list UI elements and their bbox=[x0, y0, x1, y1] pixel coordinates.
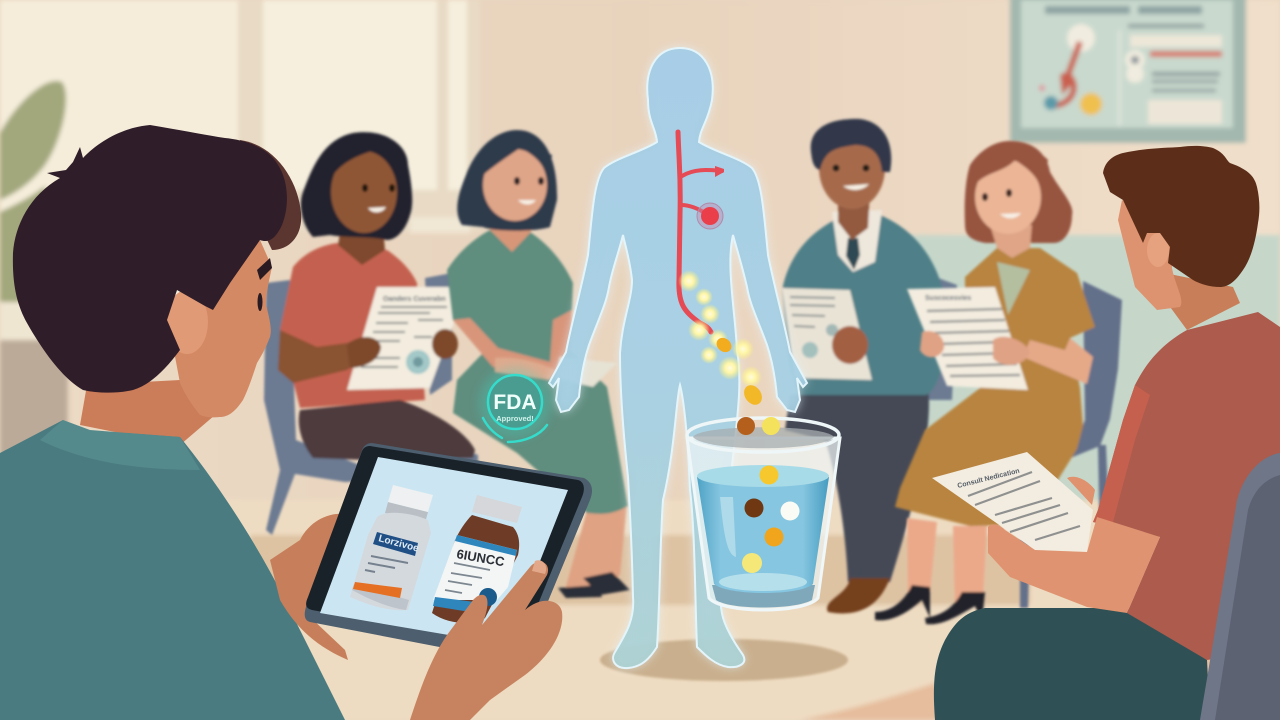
FDA approved badge: Approved! bbox=[496, 414, 534, 423]
chair bbox=[0, 606, 148, 720]
person: woman in green dress bbox=[447, 130, 630, 598]
shirt bbox=[0, 420, 345, 720]
water bbox=[697, 477, 829, 593]
window bbox=[0, 0, 480, 300]
arms bbox=[453, 310, 572, 378]
heart bbox=[697, 203, 723, 229]
wainscot bbox=[880, 235, 1280, 510]
arm and hand bbox=[988, 517, 1160, 613]
neck and head bbox=[490, 215, 540, 252]
shirt lit edge bbox=[1093, 385, 1150, 526]
legs bbox=[907, 518, 987, 608]
pills bbox=[737, 417, 755, 435]
hands bbox=[347, 337, 381, 368]
legs bbox=[785, 385, 929, 582]
water surface bbox=[697, 465, 829, 487]
floor shadow under hologram bbox=[600, 639, 848, 681]
sweater bbox=[782, 215, 947, 395]
paper: Suscocesvies bbox=[925, 295, 971, 302]
chair bbox=[264, 280, 478, 535]
water highlights bbox=[720, 497, 736, 557]
person: man from behind at right bbox=[932, 146, 1280, 720]
heels bbox=[875, 585, 985, 624]
collar bbox=[40, 420, 200, 470]
far hand bbox=[1067, 477, 1095, 505]
water bottom bbox=[719, 573, 807, 591]
body outer glow bbox=[549, 48, 807, 668]
body silhouette bbox=[549, 48, 807, 668]
white bottle bbox=[350, 485, 433, 610]
paper bbox=[347, 287, 467, 390]
paper bbox=[555, 357, 617, 387]
person: man in teal sweater bbox=[782, 119, 957, 613]
ear bbox=[166, 290, 208, 354]
chair back right bbox=[425, 273, 452, 395]
hair and head bbox=[965, 141, 1072, 243]
glass back interior bbox=[693, 427, 834, 448]
hands bbox=[920, 331, 1030, 365]
FDA approved badge bbox=[479, 367, 551, 442]
ledge and side table bbox=[0, 300, 100, 490]
chair bbox=[1020, 281, 1122, 608]
paper bbox=[907, 287, 1028, 390]
glass of water with pills bbox=[678, 270, 840, 610]
glass body bbox=[687, 438, 840, 610]
head bbox=[838, 190, 870, 240]
torso bbox=[280, 243, 425, 408]
arm bbox=[278, 330, 380, 383]
face bbox=[170, 240, 272, 417]
neck and head bbox=[338, 215, 385, 265]
arm bbox=[1023, 338, 1093, 384]
chair bbox=[1200, 453, 1280, 720]
hair rim bbox=[240, 140, 301, 250]
plant bbox=[0, 81, 66, 302]
neck bbox=[1150, 270, 1240, 330]
brown bottle: 6IUNCC bbox=[455, 546, 506, 569]
left hand behind tablet bbox=[270, 514, 348, 660]
paper bbox=[932, 452, 1093, 552]
person: woman in mustard dress bbox=[875, 141, 1122, 624]
ear bbox=[1147, 233, 1169, 267]
white bottle: Lorzivoe bbox=[377, 533, 420, 555]
glass rim bbox=[687, 418, 839, 452]
glass base bbox=[712, 585, 815, 608]
fingertip bbox=[532, 560, 546, 574]
tablet screen bbox=[320, 457, 568, 645]
shirt bbox=[1093, 312, 1280, 660]
dress bbox=[447, 230, 628, 514]
shoe bbox=[827, 578, 890, 613]
poster bbox=[1010, 0, 1246, 143]
FDA approved badge: FDA bbox=[493, 391, 537, 414]
hand bbox=[832, 326, 868, 364]
hair bbox=[1103, 146, 1259, 287]
dress bbox=[895, 248, 1095, 526]
foreground person with tablet bbox=[0, 125, 592, 720]
paper: Oanders Cuverabn bbox=[383, 296, 446, 303]
floor bbox=[0, 500, 1280, 720]
artery bbox=[678, 132, 722, 332]
legs bbox=[565, 505, 627, 590]
artery arrow head bbox=[715, 166, 724, 177]
hologram human body bbox=[549, 48, 807, 668]
person: woman in coral shirt bbox=[264, 132, 478, 535]
eye and brow bbox=[257, 258, 272, 311]
shoes bbox=[558, 572, 630, 598]
right hand bbox=[410, 562, 562, 720]
neck bbox=[80, 380, 215, 445]
legs bbox=[299, 400, 475, 460]
paper bbox=[782, 288, 872, 380]
paper: Consult Nedication bbox=[957, 468, 1020, 490]
shirt and tie bbox=[832, 210, 882, 272]
brown bottle bbox=[432, 495, 522, 623]
hands bbox=[495, 358, 555, 380]
sparkles bbox=[678, 270, 766, 408]
hair bbox=[13, 125, 287, 393]
tablet bbox=[305, 443, 592, 661]
face bbox=[1118, 200, 1181, 310]
trousers bbox=[934, 608, 1210, 720]
inner shirt bbox=[997, 262, 1030, 315]
chair bbox=[925, 275, 957, 400]
